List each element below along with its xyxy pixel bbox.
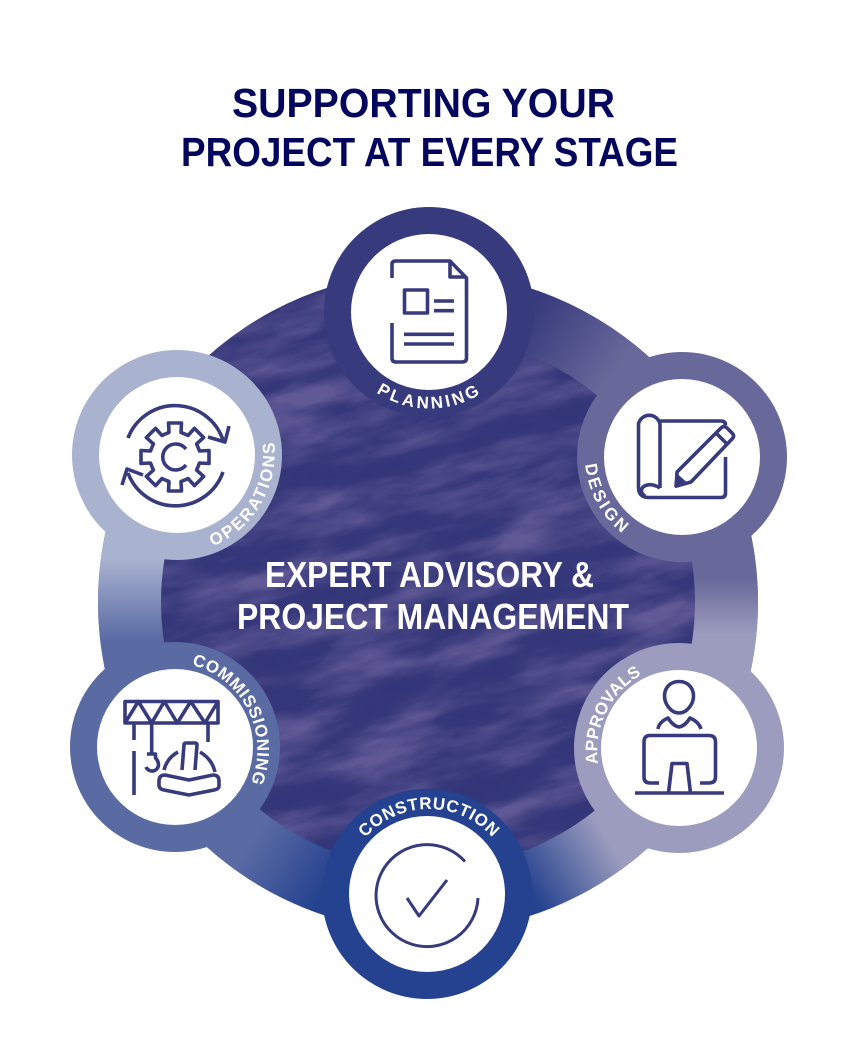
panel: commissioning <box>70 642 280 852</box>
icon: person at computer <box>635 682 724 793</box>
panel: approvals <box>574 643 784 853</box>
title: SUPPORTING YOUR <box>232 80 615 126</box>
center heading <box>237 554 629 637</box>
title: PROJECT AT EVERY STAGE <box>181 129 678 175</box>
icon: document <box>392 261 466 362</box>
water background disc <box>98 288 758 916</box>
icon: check mark in circle <box>376 845 478 947</box>
panel: operations <box>72 350 282 560</box>
title <box>181 80 678 175</box>
ring segments <box>98 272 758 932</box>
label: approvals: APPROVALS <box>586 666 640 764</box>
center heading: EXPERT ADVISORY & <box>265 554 594 595</box>
label: construction: CONSTRUCTION <box>359 797 500 836</box>
label: operations: OPERATIONS <box>210 443 275 544</box>
label: design: DESIGN <box>585 464 629 532</box>
panel: design <box>577 352 787 562</box>
icon: blueprint and pencil <box>638 415 734 498</box>
center heading: PROJECT MANAGEMENT <box>237 596 629 637</box>
label: planning: PLANNING <box>377 383 478 409</box>
panel: planning <box>324 207 532 414</box>
icon: crane and hard hat <box>125 702 219 795</box>
label: commissioning: COMMISSIONING <box>194 655 270 784</box>
panel: construction <box>324 789 531 999</box>
icon: gear with cycle arrows <box>122 406 229 506</box>
